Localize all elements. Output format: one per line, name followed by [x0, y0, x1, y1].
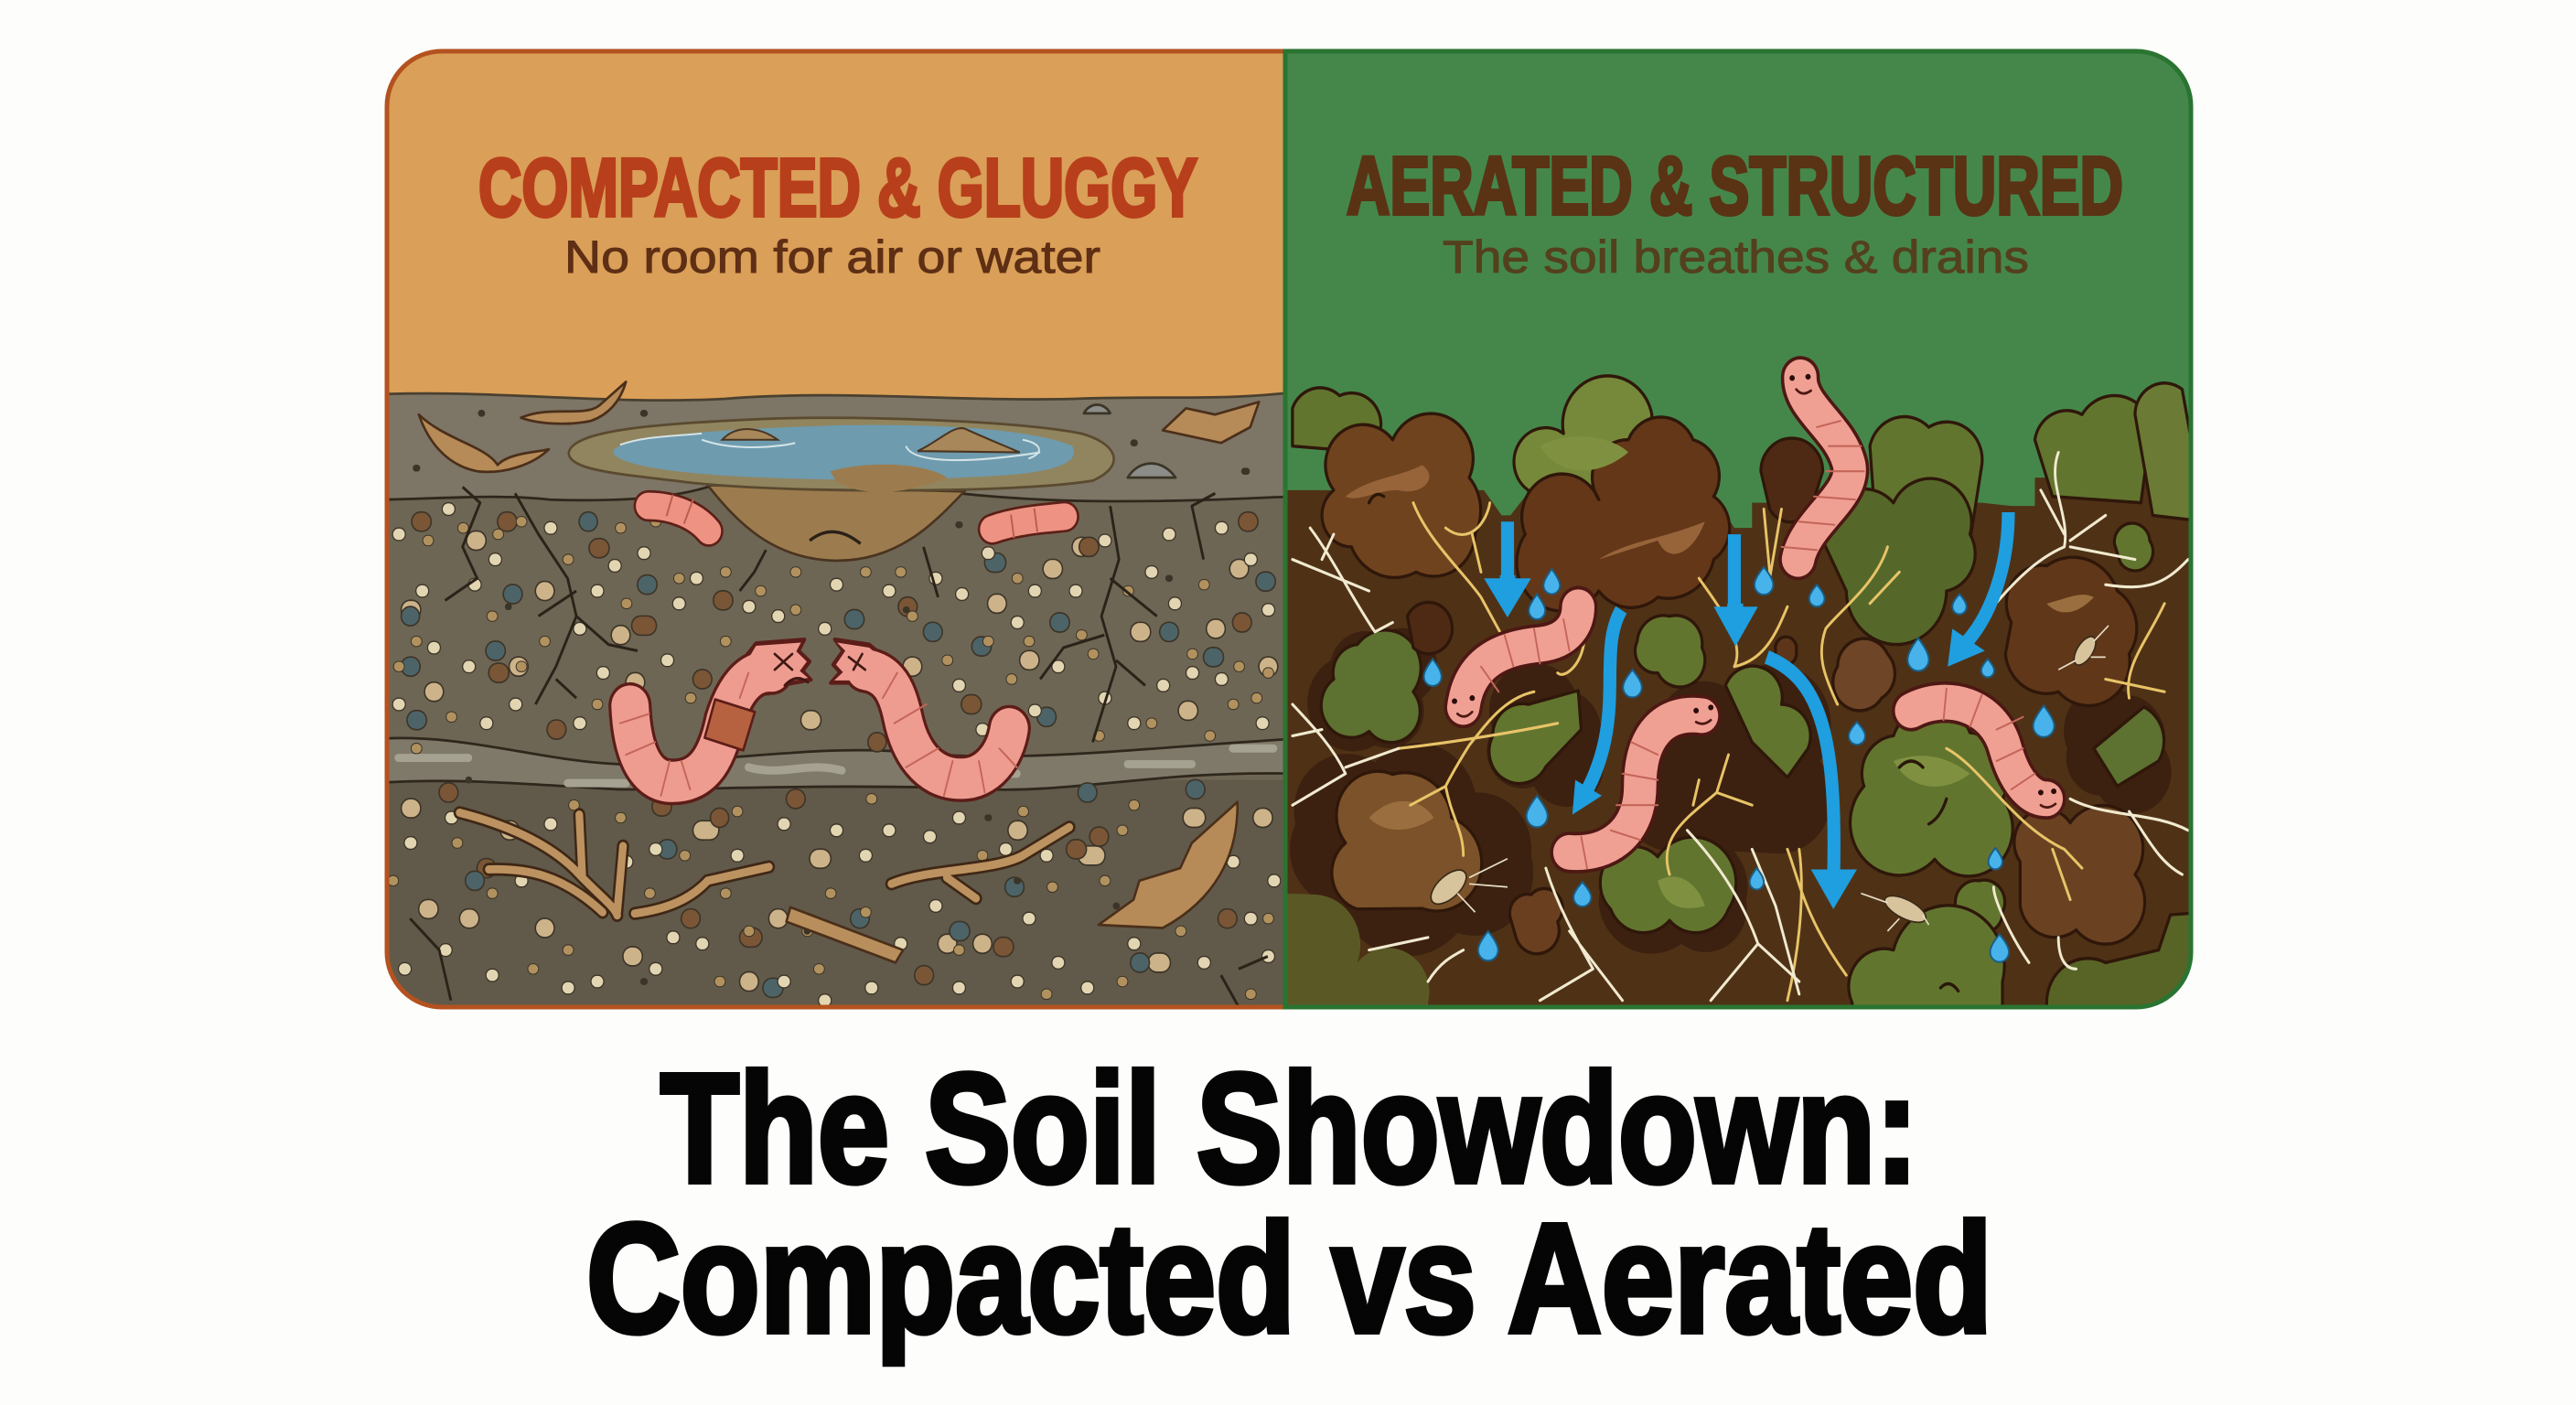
green sky background [1288, 53, 2188, 529]
soil cross-section layers [375, 392, 1291, 1045]
water flow arrows [1484, 512, 2008, 909]
heading: aerated and structured: AERATED & STRUCTURED [1347, 141, 2123, 232]
heading: compacted and gluggy: COMPACTED & GLUGGY [478, 143, 1197, 234]
damaged clitellum band [704, 700, 755, 750]
water droplets [1424, 567, 2055, 962]
subheading: the soil breathes and drains: The soil breathes & drains [1443, 231, 2029, 283]
right panel border [1285, 51, 2191, 1007]
plant roots [1293, 453, 2188, 1001]
main title [586, 1042, 1992, 1366]
left panel border [387, 51, 1285, 1007]
brown soil base [1281, 477, 2206, 1045]
clump highlights [1346, 465, 1705, 560]
dead leaves and twigs [419, 381, 1259, 962]
brown clumps [1322, 413, 2145, 954]
happy earthworms [1454, 377, 2055, 868]
small worms near the puddle [648, 495, 1065, 538]
cracks in the dry soil [410, 487, 1268, 1007]
pebbles in soil [392, 413, 1274, 1001]
tiny soil bugs [1425, 626, 2109, 931]
panel: compacted and gluggy soil [375, 37, 1291, 1045]
broken worm left half [620, 639, 810, 796]
dark halos around clumps [1290, 628, 2172, 957]
soil clumps [1281, 376, 2206, 1019]
subheading: no room for air or water: No room for air or water [564, 231, 1100, 283]
main title: The Soil Showdown: [660, 1042, 1918, 1216]
orange sky background [390, 53, 1283, 399]
main title: Compacted vs Aerated [586, 1192, 1992, 1366]
panel: aerated and structured soil [1281, 37, 2206, 1045]
worm faces [1457, 390, 2055, 808]
muddy puddle [569, 418, 1114, 561]
green clumps [1281, 376, 2206, 1019]
broken worm right half [831, 639, 1017, 796]
